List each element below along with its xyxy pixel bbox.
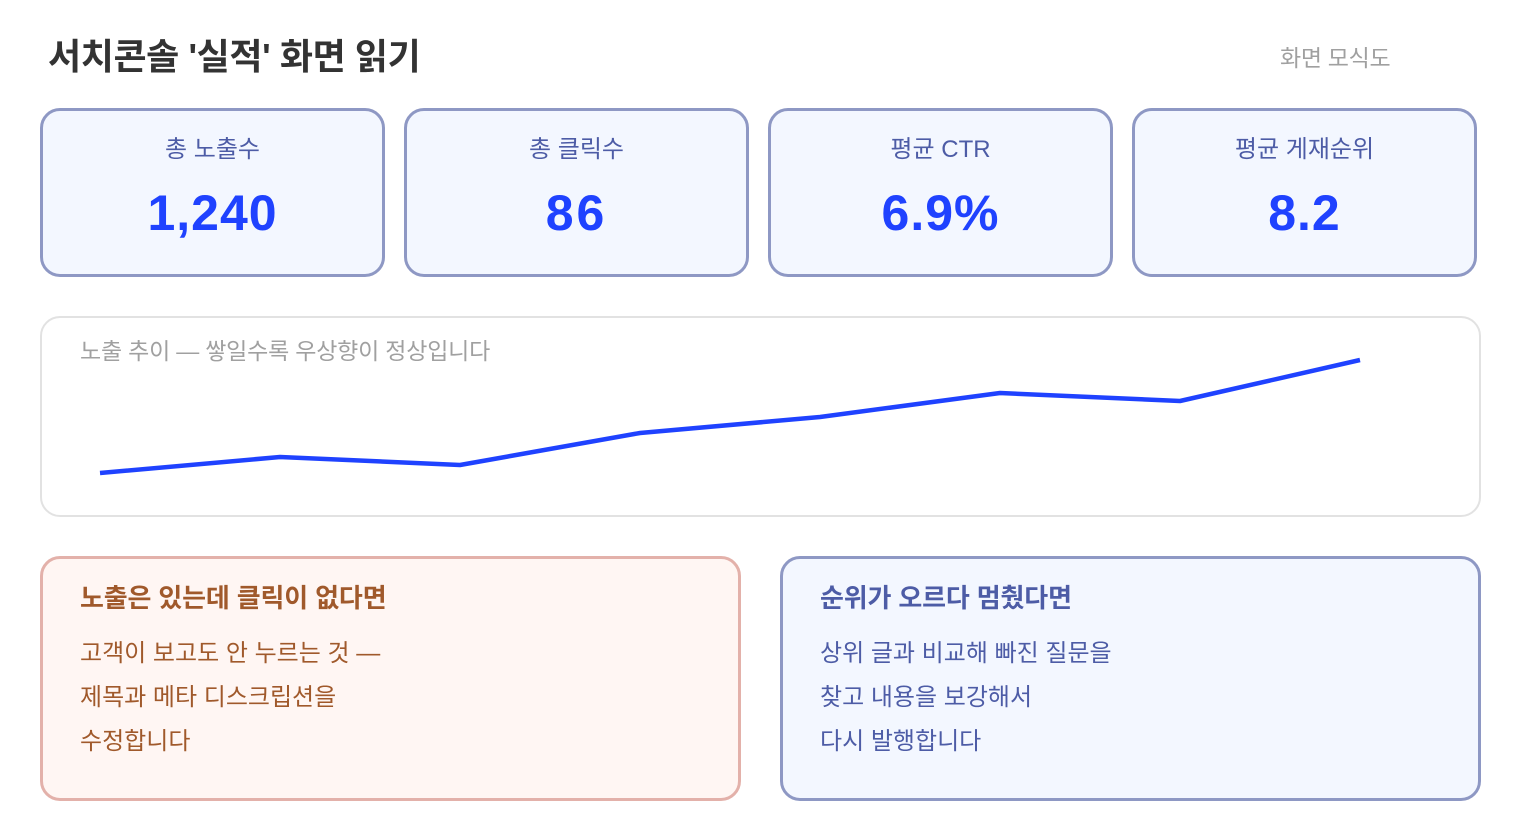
body line 2: 찾고 내용을 보강해서 xyxy=(820,684,1032,711)
panel: impressions without clicks xyxy=(40,556,741,801)
body line 2: 제목과 메타 디스크립션을 xyxy=(80,684,336,711)
body line 3: 수정합니다 xyxy=(80,728,190,755)
label: 평균 게재순위 xyxy=(1235,136,1374,163)
value: 86 xyxy=(546,185,607,241)
KPI card: average position xyxy=(1132,108,1477,277)
label: 총 클릭수 xyxy=(529,136,624,163)
chart caption: 노출 추이 — 쌓일수록 우상향이 정상입니다 xyxy=(80,338,490,364)
panel heading: 노출은 있는데 클릭이 없다면 xyxy=(80,583,386,613)
value: 1,240 xyxy=(147,185,278,241)
body line 1: 상위 글과 비교해 빠진 질문을 xyxy=(820,640,1112,667)
body line 1: 고객이 보고도 안 누르는 것 — xyxy=(80,640,380,667)
value: 8.2 xyxy=(1268,185,1341,241)
KPI card: average CTR xyxy=(768,108,1113,277)
KPI card: total clicks xyxy=(404,108,749,277)
title: 서치콘솔 '실적' 화면 읽기 xyxy=(48,36,420,77)
panel heading: 순위가 오르다 멈췄다면 xyxy=(820,583,1072,613)
label: 총 노출수 xyxy=(165,136,260,163)
KPI card: total impressions xyxy=(40,108,385,277)
body line 3: 다시 발행합니다 xyxy=(820,728,981,755)
subtitle: screen mockup label: 화면 모식도 xyxy=(1280,45,1390,71)
panel: ranking stalled xyxy=(780,556,1481,801)
label: 평균 CTR xyxy=(890,136,991,163)
panel: impressions trend xyxy=(40,316,1481,517)
value: 6.9% xyxy=(882,185,999,241)
